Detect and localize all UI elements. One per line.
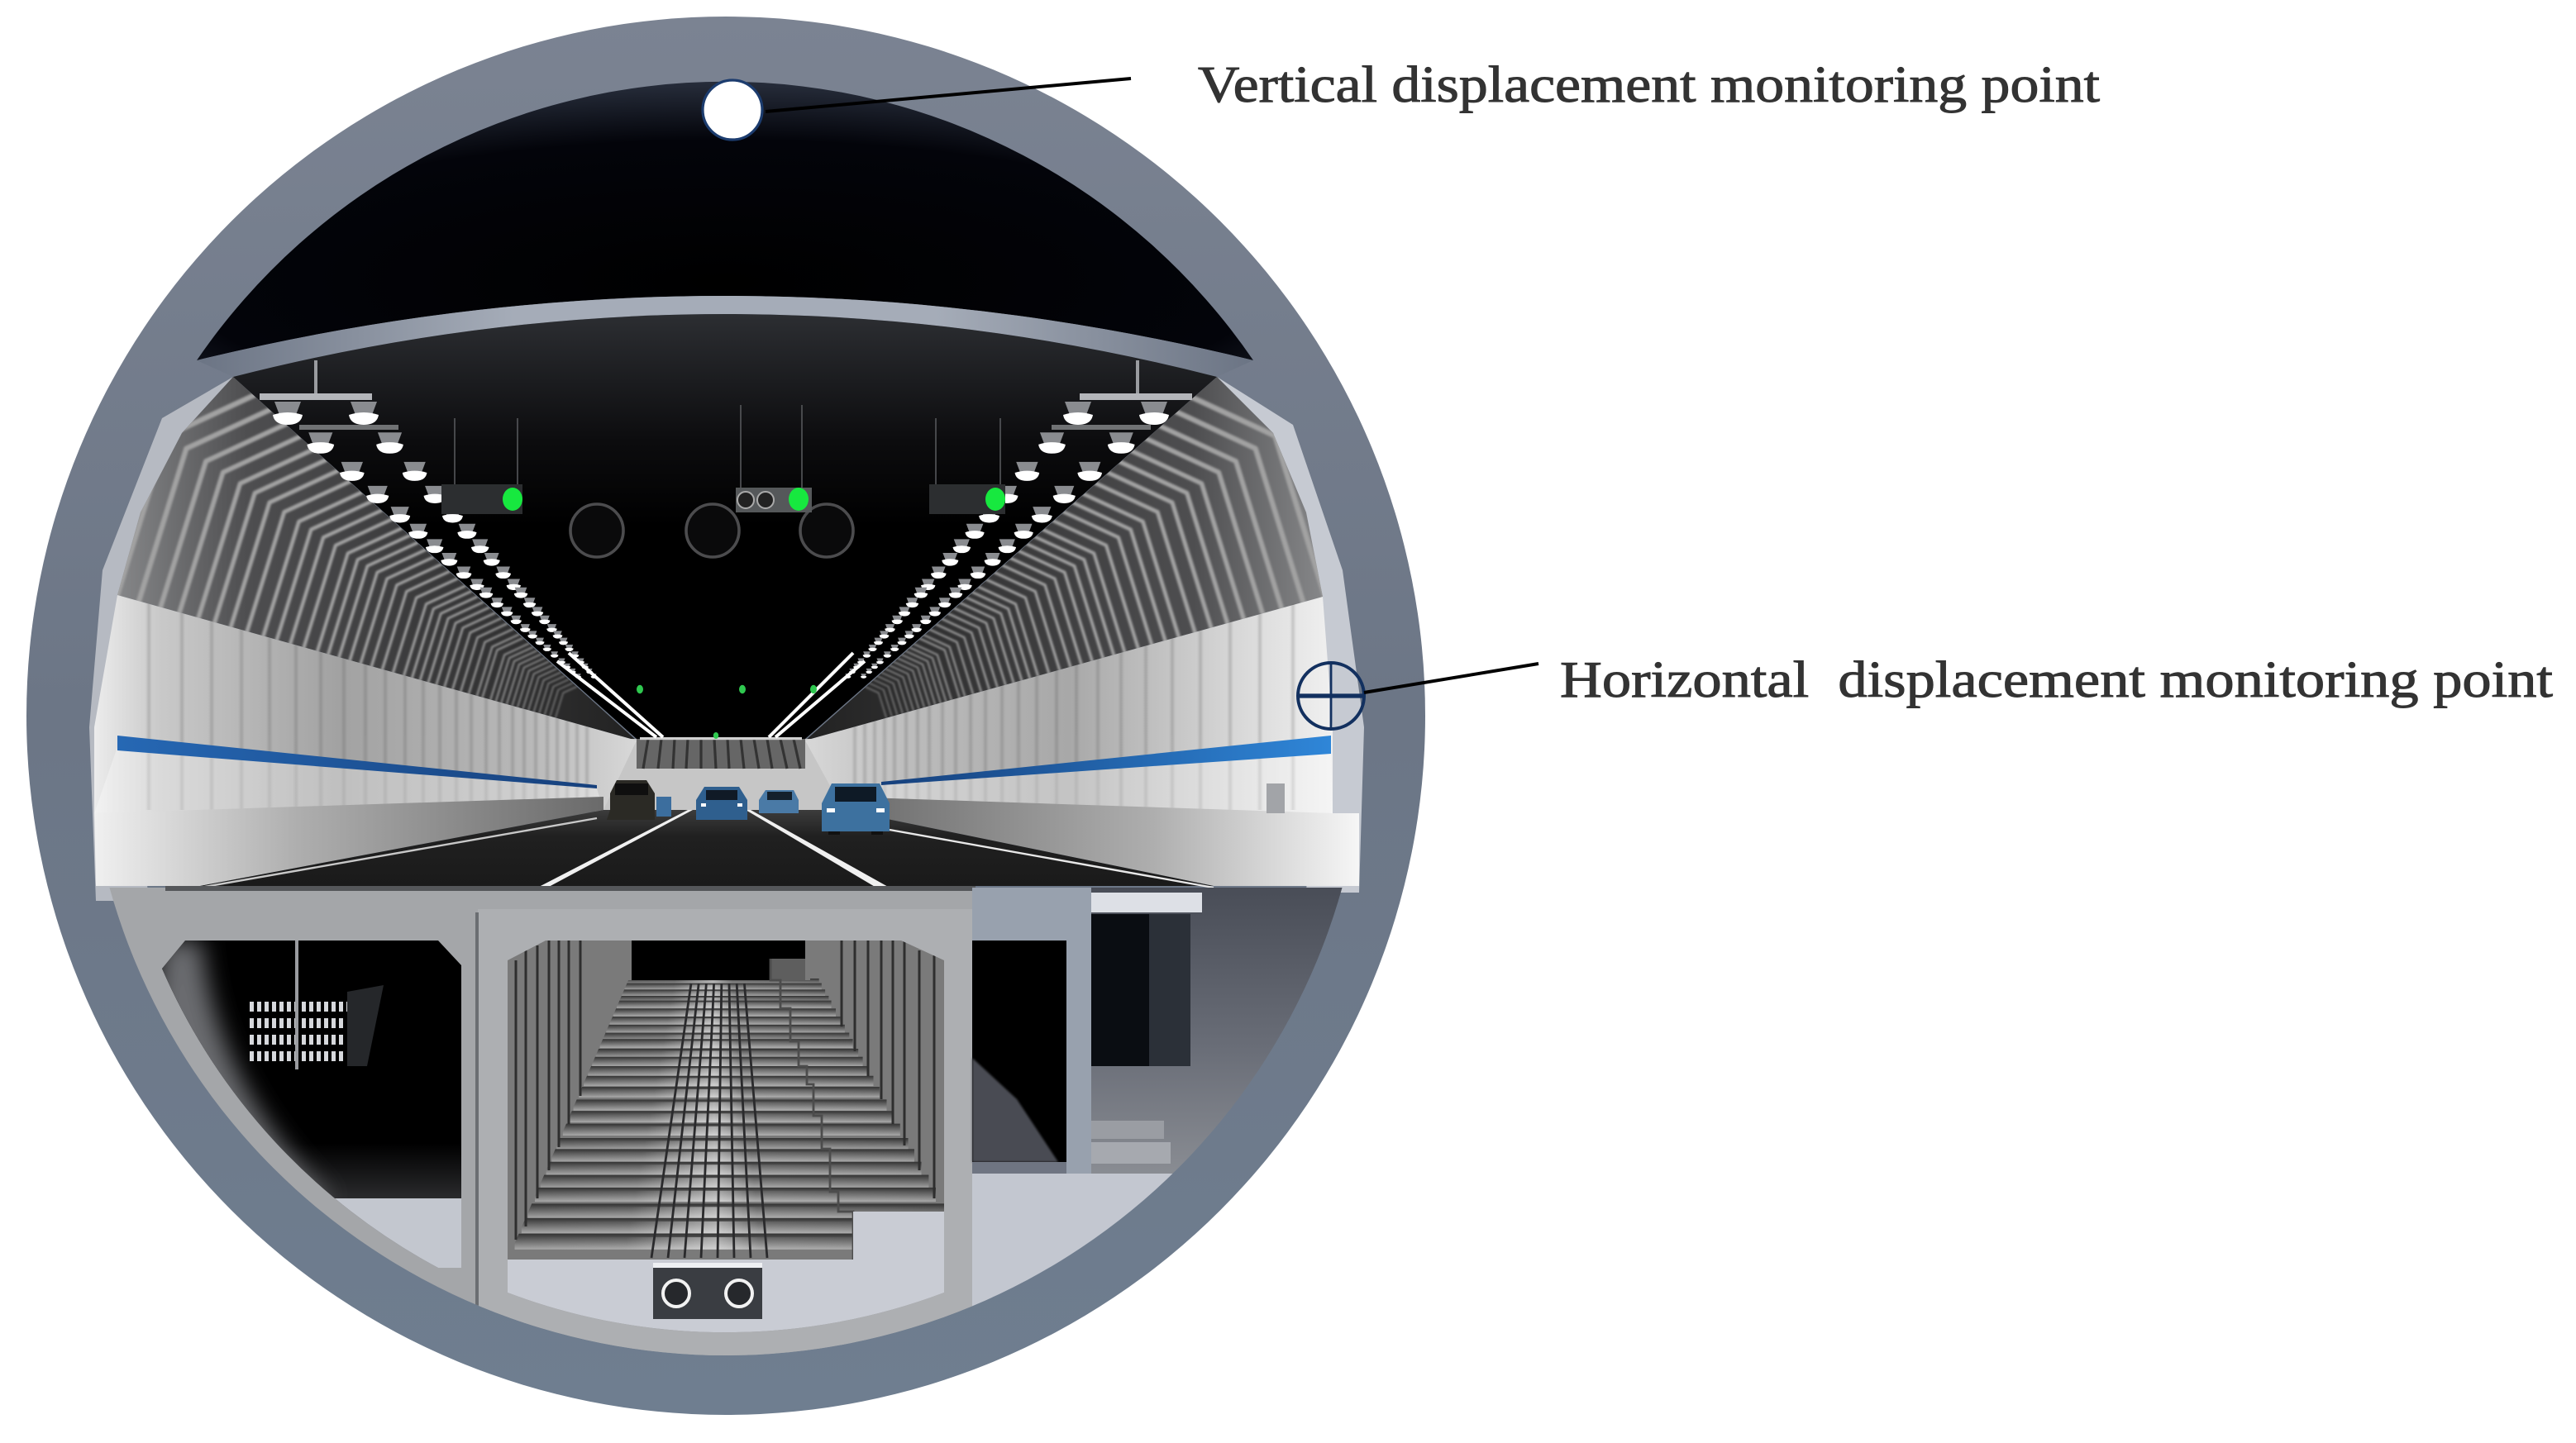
centre cable lines xyxy=(651,983,767,1258)
wall door xyxy=(1267,783,1285,813)
label: horizontal displacement: Horizontal displacement monitoring point xyxy=(1560,652,2553,708)
outer tunnel ring xyxy=(26,17,1425,1415)
right ribbed ceiling panel xyxy=(805,377,1326,741)
tunnel ceiling xyxy=(233,314,1217,739)
right wall xyxy=(805,597,1333,813)
upper vault xyxy=(197,82,1253,360)
upper right stair xyxy=(770,959,805,980)
service steps xyxy=(1091,1121,1171,1164)
lower left wall xyxy=(94,797,603,886)
dark equipment bay xyxy=(1091,914,1190,1066)
tunnel cross-section xyxy=(26,17,1538,1415)
cars xyxy=(607,780,890,835)
right floor xyxy=(972,1174,1172,1306)
concrete base xyxy=(109,888,992,1355)
lower right wall xyxy=(843,797,1359,886)
horizontal displacement marker xyxy=(1298,663,1364,729)
distant green signals xyxy=(637,685,817,739)
label: vertical displacement: Vertical displacement monitoring point xyxy=(1198,57,2100,113)
left lamps xyxy=(260,360,663,737)
lane signals xyxy=(441,405,1005,514)
ceiling slab xyxy=(197,296,1253,377)
left wall xyxy=(94,595,637,813)
back opening xyxy=(632,941,805,980)
road xyxy=(200,810,1214,886)
horizontal leader line xyxy=(1364,664,1538,693)
wall panel lines xyxy=(149,496,1293,818)
pipe box xyxy=(653,1263,762,1319)
service slab xyxy=(1091,893,1202,912)
right gallery opening xyxy=(972,941,1066,1174)
stepped edge xyxy=(770,959,853,1260)
road slab xyxy=(165,886,976,891)
far ceiling slab xyxy=(637,737,805,769)
machinery room xyxy=(1091,888,1343,1174)
lower structure xyxy=(109,886,992,1355)
jet fans xyxy=(570,504,853,557)
vertical leader line xyxy=(766,79,1131,112)
left utility chamber xyxy=(162,941,461,1268)
left ribbed ceiling panel xyxy=(116,377,637,741)
right lower structure xyxy=(971,888,1343,1306)
gallery floor xyxy=(508,1212,944,1332)
gallery side wall lines xyxy=(516,941,934,1240)
right lamps xyxy=(769,360,1192,737)
road markings xyxy=(200,810,1214,888)
vertical displacement marker xyxy=(703,80,762,140)
tunnel far end xyxy=(595,739,852,818)
central concrete frame xyxy=(478,909,972,1405)
wall light below stripe xyxy=(94,747,1333,813)
blue-grey column xyxy=(972,888,1091,1174)
left blue stripe xyxy=(117,736,597,788)
right blue stripe xyxy=(881,736,1331,785)
cable rack xyxy=(250,941,384,1069)
central gallery xyxy=(508,941,944,1332)
side linings xyxy=(89,377,1364,901)
